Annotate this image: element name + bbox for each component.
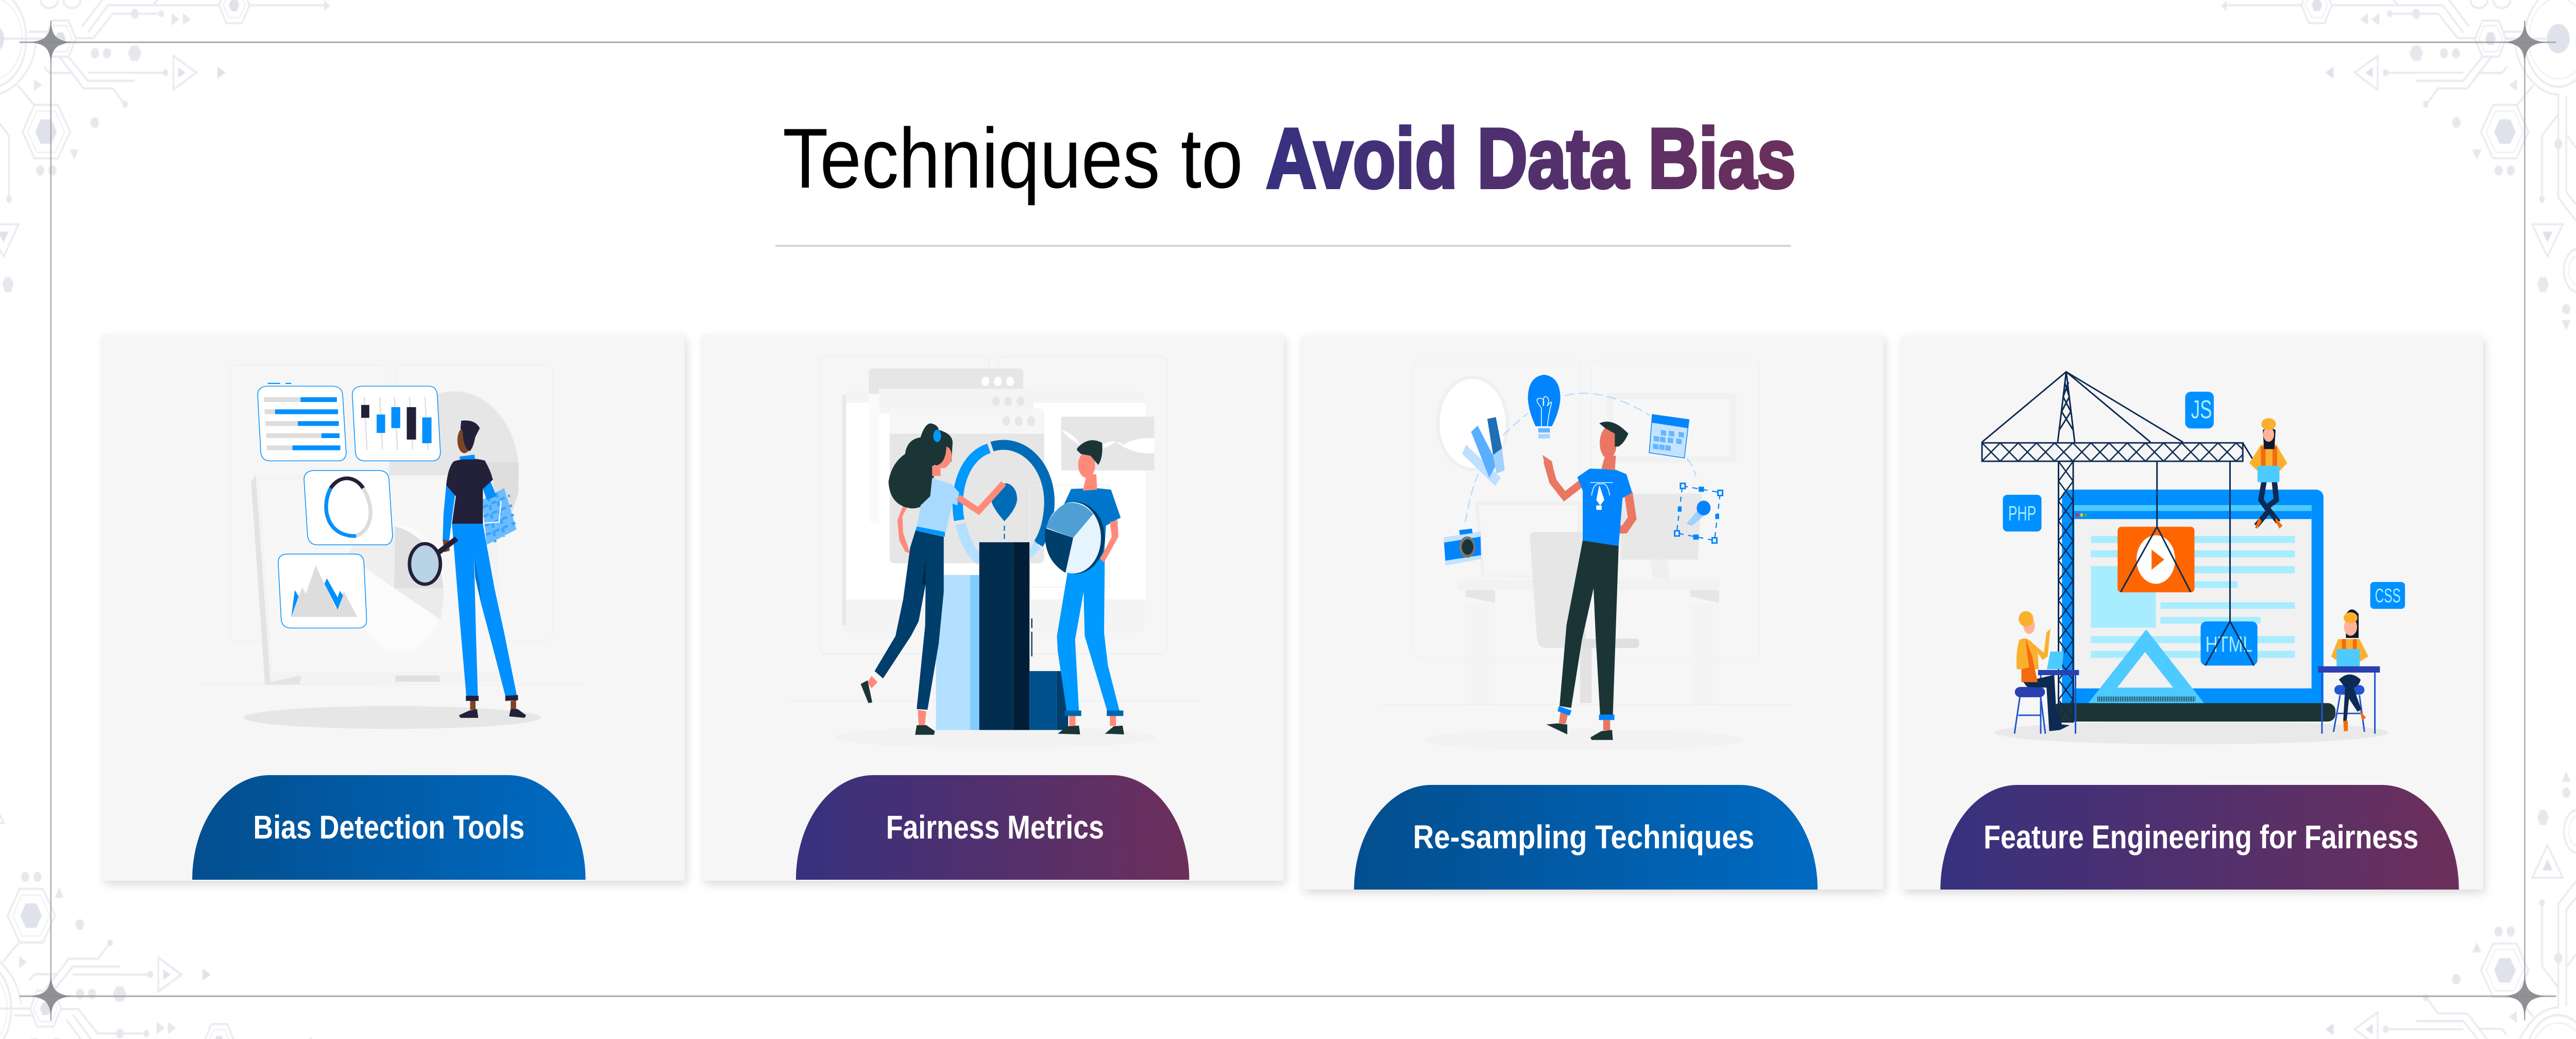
title underline [775,245,1791,247]
label pill: Fairness Metrics: Fairness Metrics [886,809,1104,846]
illustration: designer with bulb, swatches, camera and calendar [1439,375,1724,740]
title: Avoid Data Bias [1266,111,1796,206]
panel: Feature Engineering for Fairness [1902,336,2483,890]
label pill: Re-sampling Techniques [1354,785,1818,890]
label pill: Feature Engineering for Fairness: Feature Engineering for Fairness [1984,819,2418,856]
illustration: man inspecting chart cards with magnifier [243,382,541,729]
label pill: Re-sampling Techniques: Re-sampling Techniques [1413,819,1754,856]
label pill: Feature Engineering for Fairness [1940,785,2459,890]
panel: Bias Detection Tools [103,334,685,881]
label pill: Bias Detection Tools: Bias Detection Tools [253,809,524,846]
illustration: crane building a web page with workers: HTML [2205,632,2252,657]
illustration: crane building a web page with workers: PHP [2008,501,2036,525]
title [783,111,1796,206]
title: Techniques to [783,111,1243,206]
label pill: Fairness Metrics [796,775,1189,880]
illustration: crane building a web page with workers: JS [2191,395,2212,424]
illustration: two people with gauge and bar chart [820,356,1167,735]
panel: Re-sampling Techniques [1302,336,1884,890]
illustration: crane building a web page with workers: CSS [2375,585,2401,607]
label pill: Bias Detection Tools [192,775,586,880]
illustration: crane building a web page with workers [1981,371,2405,744]
panel: Fairness Metrics [702,334,1284,881]
